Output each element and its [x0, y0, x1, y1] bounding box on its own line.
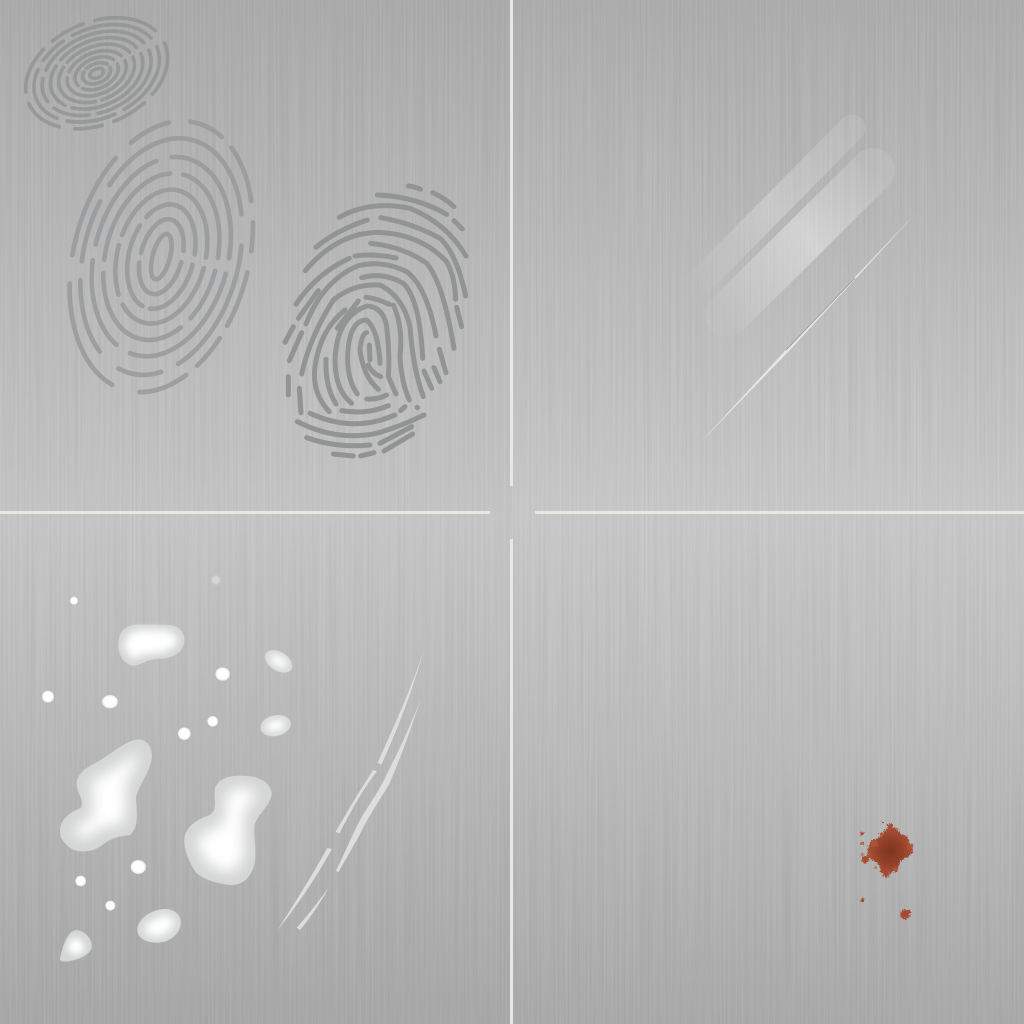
- panel: fingerprints: [8, 0, 466, 456]
- rust specks: [859, 820, 911, 920]
- small smudged fingerprint: [8, 0, 185, 150]
- thin diagonal scratch: [699, 212, 917, 444]
- panel: rust spot: [859, 820, 912, 920]
- large faint fingerprint: [41, 100, 281, 413]
- stain blob right lower: [258, 712, 293, 739]
- stain blob center large: [184, 776, 272, 885]
- rust main cluster: [860, 822, 912, 876]
- stain blob bottom left: [60, 930, 92, 962]
- stain blob right upper: [261, 645, 296, 677]
- stain blob top: [118, 624, 184, 666]
- curved streak marks: [277, 648, 424, 930]
- sharp fingerprint: [285, 186, 466, 456]
- glare band lower: [727, 170, 873, 315]
- stain blob left large: [60, 739, 152, 851]
- panel: water stains and streaks: [42, 576, 424, 962]
- glare band upper: [692, 128, 852, 290]
- small water droplets: [42, 576, 230, 911]
- panel: glare and scratch: [692, 128, 917, 444]
- stain blob bottom: [137, 909, 181, 943]
